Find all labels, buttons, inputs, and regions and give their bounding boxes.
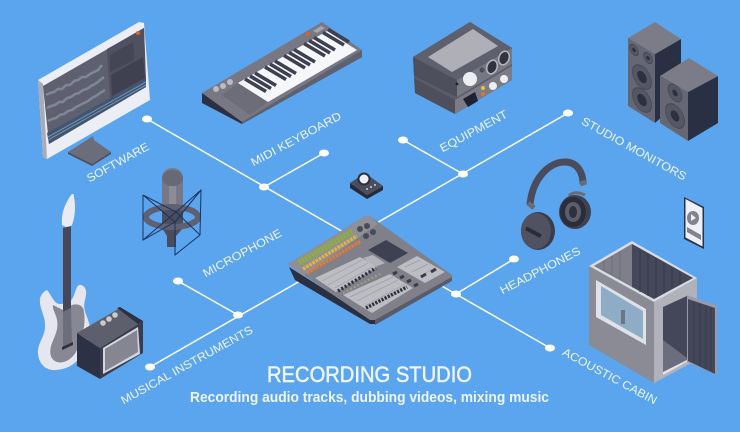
title: RECORDING STUDIO: [267, 362, 472, 387]
icon: small control knob box: [350, 172, 383, 199]
label: acoustic cabin: ACOUSTIC CABIN: [560, 347, 659, 407]
icon: computer monitor: [38, 22, 150, 166]
level meters: [299, 231, 361, 273]
icon: guitar amplifier: [77, 307, 143, 379]
label: musical instruments: MUSICAL INSTRUMENTS: [119, 324, 256, 407]
icon: acoustic cabin: [589, 241, 717, 383]
icon: headphones: [521, 162, 591, 250]
label: midi keyboard: MIDI KEYBOARD: [249, 110, 344, 169]
label: software: SOFTWARE: [85, 141, 152, 185]
label: microphone: MICROPHONE: [201, 227, 285, 280]
connector network: [142, 110, 573, 370]
icon: microphone: [143, 168, 201, 255]
icon: MIDI keyboard: [202, 22, 362, 124]
icon: studio monitors: [628, 22, 718, 141]
mixing console: [288, 216, 452, 325]
cabin left wall: [589, 266, 654, 383]
label: studio monitors: STUDIO MONITORS: [579, 116, 688, 184]
icon: electric guitar: [38, 194, 90, 370]
door opening: [663, 296, 687, 374]
window: [596, 280, 646, 345]
open door: [687, 295, 717, 375]
subtitle: Recording audio tracks, dubbing videos, mixing music: [190, 389, 549, 406]
label: headphones: HEADPHONES: [498, 245, 583, 297]
icon: audio interface: [413, 22, 512, 114]
icon: smartphone: [684, 197, 704, 249]
label: equipment: EQUIPMENT: [438, 109, 510, 155]
